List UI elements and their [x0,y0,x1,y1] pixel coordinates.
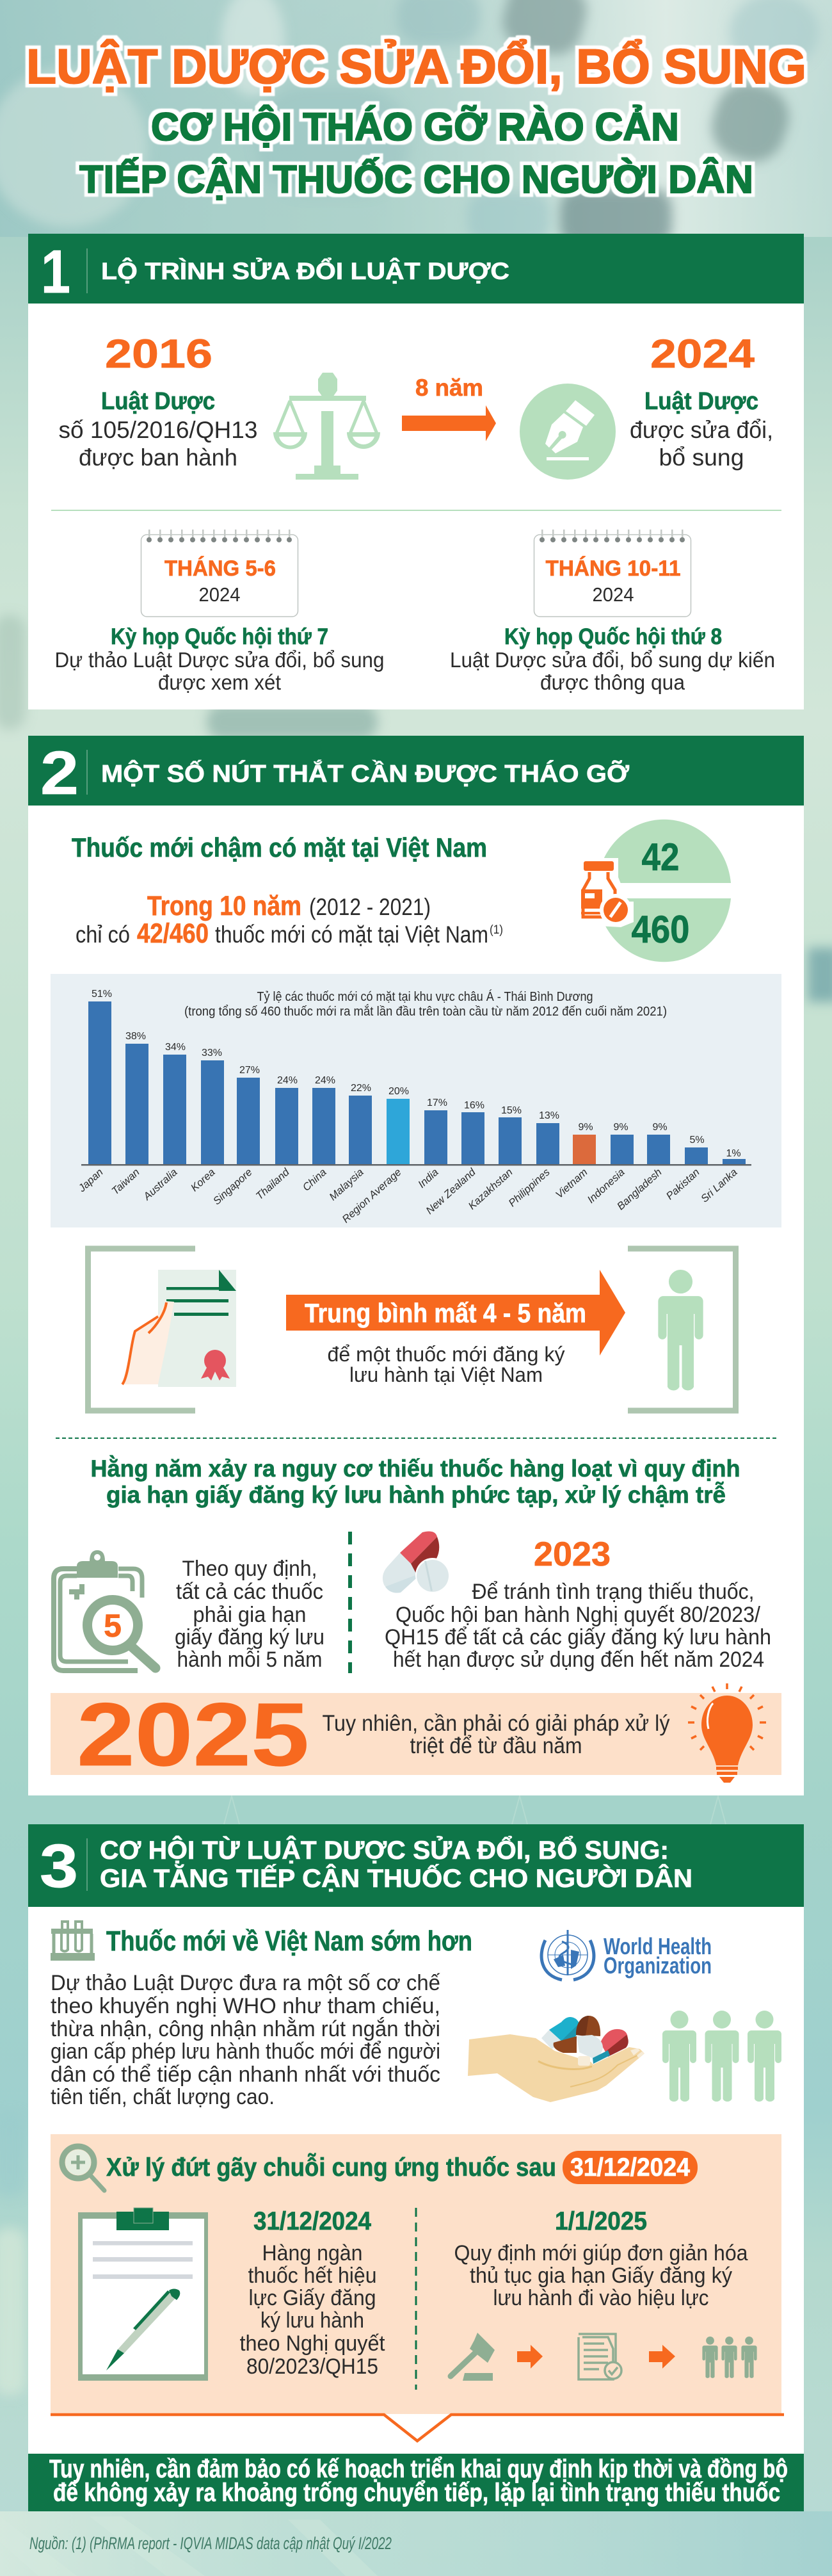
text: 31/12/2024: 31/12/2024 [253,2207,372,2235]
text: every 5 years: Theo quy định, [182,1557,317,1581]
icon: calendar 10-11 [534,530,691,617]
text: 31/12/2024: Hàng ngàn [262,2241,362,2265]
country labels: China [301,1167,329,1194]
text: 2016: Luật Dược [101,388,215,415]
panel: section 1 [28,234,804,709]
bar values [92,989,741,1159]
text: session 7 [55,624,384,694]
header: section 1: 1 [41,238,70,306]
bar values: 51% [92,989,112,1000]
text: draft law: thừa nhận, công nhận nhằm rút ngắn thời [51,2017,440,2041]
icon: three people [662,2011,781,2102]
chart: 42 of 460 circle [576,820,731,962]
country labels: Thailand [254,1166,292,1202]
text: 2024: được sửa đổi, [630,417,773,443]
text: registration [328,1343,564,1386]
icon: calendar 5-6 [141,530,298,617]
text: 2016: được ban hành [79,444,237,471]
text: draft law [51,1971,440,2109]
chart: 42 of 460 circle: 460 [631,908,690,951]
icon: document with check [579,2334,621,2379]
text: session 8 [450,624,775,694]
icon: hand with pills [468,2016,644,2102]
text: 1/1/2025: 1/1/2025 [555,2207,647,2235]
text: every 5 years [175,1557,324,1672]
panel: supply chain [51,2134,784,2441]
text: draft law: Dự thảo Luật Dược đưa ra một số cơ chế [51,1971,440,1995]
bar values: 27% [239,1065,260,1076]
country labels: India [416,1167,441,1190]
title [26,39,806,201]
icon: medicine bottle [576,858,634,927]
country labels: Australia [141,1167,180,1203]
text: 1/1/2025 [454,2207,748,2310]
callout: 2025: triệt để từ đầu năm [410,1733,582,1758]
text: 2024: 2024 [650,332,755,377]
text: session 7: được xem xét [158,670,281,694]
bar values: 34% [165,1042,186,1053]
callout: closing message [28,2454,804,2511]
header: section 3 [28,1824,804,1907]
panel: section 2 [28,736,804,1795]
text: 1/1/2025: thủ tục gia hạn Giấy đăng ký [470,2264,732,2288]
bar values: 16% [464,1100,484,1111]
subheading: new drugs: Thuốc mới chậm có mặt tại Việt Nam [72,832,487,863]
text: resolution 80/2023: Để tránh tình trạng thiếu thuốc, [472,1580,754,1604]
header: section 2: 2 [40,739,79,807]
icon: gavel [451,2333,495,2381]
country labels: Korea [189,1167,218,1194]
callout: 2025: 2025 [77,1684,309,1785]
header: section 2 [28,736,804,807]
callout: 4-5 years [88,1249,736,1411]
text: in 10 years [76,891,503,949]
title: LUẬT DƯỢC SỬA ĐỔI, BỔ SUNG [26,39,806,94]
country labels: Kazakhstan [467,1167,515,1212]
text: resolution 80/2023: hết hạn được sử dụng đến hết năm 2024 [393,1648,764,1672]
subheading: shortage risk: gia hạn giấy đăng ký lưu hành phức tạp, xử lý chậm trễ [106,1482,726,1508]
text: in 10 years: 42/460 [137,918,209,949]
text: draft law: gian cấp phép lưu hành thuốc mới để người [51,2039,440,2064]
header: section 1 [28,234,804,306]
country labels: Pakistan [664,1167,702,1202]
icon: calendar 10-11: 2024 [593,583,634,606]
title: CƠ HỘI THÁO GỠ RÀO CẢN [151,105,679,149]
bar values: 38% [125,1031,146,1042]
text: draft law: theo khuyến nghị WHO như tham chiếu, [51,1994,440,2018]
country labels: Malaysia [327,1167,366,1203]
subheading: supply chain: Xử lý đứt gãy chuỗi cung ứng thuốc sau [106,2152,556,2182]
text: 2016: 2016 [105,332,212,377]
text: 4-5 years: Trung bình mất 4 - 5 năm [305,1298,586,1328]
arrow [649,2345,675,2369]
text: every 5 years: phải gia hạn [193,1603,306,1627]
logo: WHO: Organization [604,1952,712,1979]
arrow: 8 years [402,405,496,441]
badge: date: 31/12/2024 [570,2153,691,2182]
text: 1/1/2025: Quy định mới giúp đơn giản hóa [454,2241,748,2265]
country labels: Japan [76,1167,106,1195]
text: 2024 [630,332,773,471]
icon: pen in circle [520,384,616,480]
country labels: New Zealand [424,1166,478,1217]
icon: three small people [702,2337,757,2378]
text: every 5 years: tất cả các thuốc [176,1580,323,1604]
icon: clipboard with pen [78,2208,208,2381]
text: session 7: Dự thảo Luật Dược sửa đổi, bổ sung [55,648,384,672]
text: session 8: được thông qua [540,670,685,694]
text: session 7: Kỳ họp Quốc hội thứ 7 [111,624,328,649]
text: resolution 80/2023: QH15 để tất cả các giấy đăng ký lưu hành [385,1625,771,1649]
text: in 10 years: (1) [490,923,503,937]
subheading: earlier drugs: Thuốc mới về Việt Nam sớm hơn [106,1925,472,1957]
bar values: 15% [501,1105,522,1116]
text: 31/12/2024: 80/2023/QH15 [246,2354,378,2379]
icon: magnifier with plus [62,2146,104,2191]
bar values: 33% [202,1048,222,1058]
chart title [184,989,667,1019]
logo: WHO: World Health [604,1933,712,1959]
source note: Nguồn: (1) (PhRMA report - IQVIA MIDAS data cập nhật Quý I/2022 [29,2534,392,2553]
chart title: (trong tổng số 460 thuốc mới ra mắt lần đầu trên toàn cầu từ năm 2012 đến cuối năm 2021) [184,1004,667,1019]
text: in 10 years: (2012 - 2021) [309,894,431,920]
text: every 5 years: giấy đăng ký lưu [175,1625,324,1649]
text: 2024: Luật Dược [644,388,758,415]
text: in 10 years: Trong 10 năm [147,891,301,921]
icon: scales [273,373,380,480]
bar values: 9% [613,1122,628,1133]
header: section 1: LỘ TRÌNH SỬA ĐỔI LUẬT DƯỢC [101,257,509,284]
arrow [517,2345,543,2369]
bar values: 22% [351,1083,371,1094]
icon: licence document with hand [122,1270,236,1387]
text: 2016: số 105/2016/QH13 [59,417,257,443]
callout: 2025: Tuy nhiên, cần phải có giải pháp xử lý [323,1711,670,1736]
panel: section 3 [28,1824,804,2454]
text: resolution 80/2023 [385,1580,771,1672]
chart: bar chart of new medicine availability [51,974,781,1227]
bar values: 24% [315,1075,335,1086]
country labels [76,1166,740,1226]
country labels: Bangladesh [615,1167,664,1212]
bar values: 5% [689,1135,705,1146]
icon: calendar 10-11: THÁNG 10-11 [545,556,681,581]
text: draft law: dân có thể tiếp cận nhanh nhất với thuốc [51,2062,440,2087]
header: section 3: 3 [40,1832,78,1900]
icon: person [658,1270,703,1390]
text: in 10 years: chỉ có [76,921,130,948]
text: 2016 [59,332,257,471]
text: 31/12/2024: thuốc hết hiệu [248,2264,376,2288]
icon: light bulb [688,1683,766,1783]
header: section 3: CƠ HỘI TỪ LUẬT DƯỢC SỬA ĐỔI, BỔ SUNG: [100,1835,669,1865]
bar values: 13% [539,1110,559,1121]
text: in 10 years: thuốc mới có mặt tại Việt Nam [215,921,488,948]
text: 31/12/2024: ký lưu hành [260,2308,364,2333]
text: resolution 80/2023: Quốc hội ban hành Nghị quyết 80/2023/ [396,1603,761,1627]
country labels: Indonesia [585,1167,627,1206]
logo: WHO [541,1930,712,1980]
arrow: 4-5 years [286,1270,625,1356]
text: 31/12/2024: theo Nghị quyết [239,2331,385,2356]
text: session 8: Kỳ họp Quốc hội thứ 8 [504,624,722,649]
country labels: Taiwan [109,1167,142,1197]
text: every 5 years: hành mỗi 5 năm [177,1648,323,1672]
country labels: Singapore [211,1167,255,1207]
bar values: 20% [388,1086,409,1097]
bar values: 24% [277,1075,298,1086]
country labels: Region Average [340,1167,404,1226]
country labels: Philippines [506,1167,552,1209]
chart title: Tỷ lệ các thuốc mới có mặt tại khu vực châu Á - Thái Bình Dương [257,989,593,1004]
country labels: Vietnam [554,1167,590,1201]
country labels: Sri Lanka [699,1167,740,1205]
text: 1/1/2025: lưu hành đi vào hiệu lực [493,2286,709,2310]
chart: 42 of 460 circle: 42 [641,836,680,879]
title: TIẾP CẬN THUỐC CHO NGƯỜI DÂN [79,158,753,201]
callout: 2025 [51,1683,781,1785]
year: 2023: 2023 [534,1535,611,1573]
icon: pills [383,1532,450,1593]
bars [88,1001,746,1165]
text: 2024: bổ sung [659,444,744,471]
label: 8 years: 8 năm [415,375,483,401]
icon: calendar 5-6: 2024 [198,583,241,606]
header: section 3: GIA TĂNG TIẾP CẬN THUỐC CHO NGƯỜI DÂN [100,1863,692,1893]
bar values: 9% [578,1122,593,1133]
icon: clipboard with magnifier [54,1550,156,1671]
text: 31/12/2024: lực Giấy đăng [248,2286,376,2310]
bar values: 1% [726,1148,741,1159]
subheading: shortage risk: Hằng năm xảy ra nguy cơ thiếu thuốc hàng loạt vì quy định [91,1455,740,1482]
icon: clipboard with magnifier: 5 [104,1608,122,1644]
subheading: shortage risk [91,1455,740,1508]
icon: test tubes [51,1922,95,1961]
bar values: 17% [427,1098,447,1108]
icon: calendar 5-6: THÁNG 5-6 [164,556,276,581]
bar values: 9% [652,1122,668,1133]
text: registration: để một thuốc mới đăng ký [328,1343,564,1366]
text: draft law: tiên tiến, chất lượng cao. [51,2085,275,2109]
text: registration: lưu hành tại Việt Nam [349,1363,543,1386]
header: section 2: MỘT SỐ NÚT THẮT CẦN ĐƯỢC THÁO GỠ [101,759,630,788]
text: session 8: Luật Dược sửa đổi, bổ sung dự kiến [450,648,775,672]
text: 31/12/2024 [239,2207,385,2379]
